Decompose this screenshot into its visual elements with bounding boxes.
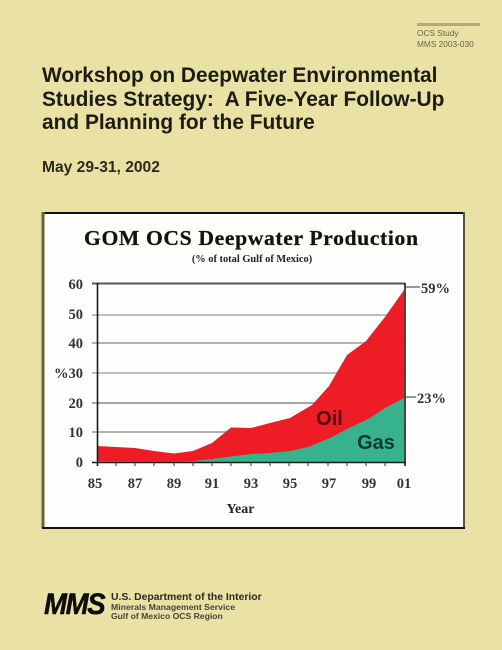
area: oil (97, 290, 404, 462)
callout: 59 percent: 59% (421, 281, 450, 297)
area: gas (97, 398, 404, 462)
y axis labels: 60 (68, 277, 83, 293)
study number block: OCS Study (417, 28, 459, 38)
title: and Planning for the Future (42, 111, 315, 134)
study number block (417, 23, 480, 50)
x axis labels: 87 (128, 476, 142, 492)
logo: MMS: MMS (44, 588, 104, 621)
callout: 59 percent (406, 281, 450, 297)
title: Studies Strategy: A Five-Year Follow-Up (42, 88, 444, 111)
panel background (43, 213, 464, 527)
x axis labels: 89 (167, 476, 181, 492)
x axis title: Year (226, 502, 254, 517)
callout: 23 percent: 23% (417, 391, 446, 407)
gas label: Gas (357, 432, 395, 454)
y axis labels (54, 277, 83, 471)
chart heading: GOM OCS Deepwater Production (84, 226, 418, 250)
agency text: Minerals Management Service (111, 602, 235, 612)
x axis labels (88, 476, 411, 492)
x axis labels: 85 (88, 476, 102, 492)
y axis labels: 50 (68, 307, 83, 323)
gridlines (92, 284, 405, 432)
x axis labels: 93 (244, 476, 258, 492)
y axis labels: %30 (54, 366, 83, 382)
chart subheading: (% of total Gulf of Mexico) (192, 254, 312, 265)
agency text (111, 592, 262, 620)
title (42, 64, 444, 134)
y axis labels: 20 (68, 396, 83, 412)
x axis labels: 99 (362, 476, 376, 492)
y axis labels: 40 (68, 336, 83, 352)
x axis labels: 97 (322, 476, 336, 492)
x axis labels: 95 (283, 476, 297, 492)
date: May 29-31, 2002 (42, 159, 160, 176)
y axis labels: 10 (68, 425, 83, 441)
axes (92, 283, 406, 466)
title: Workshop on Deepwater Environmental (42, 64, 437, 87)
x axis labels: 91 (205, 476, 219, 492)
agency text: U.S. Department of the Interior (111, 592, 262, 603)
x ticks (116, 462, 385, 466)
x axis labels: 01 (397, 476, 411, 492)
oil label: Oil (316, 408, 343, 430)
agency text: Gulf of Mexico OCS Region (111, 610, 223, 620)
y axis labels: 0 (76, 455, 83, 471)
study number block: MMS 2003-030 (417, 38, 474, 48)
